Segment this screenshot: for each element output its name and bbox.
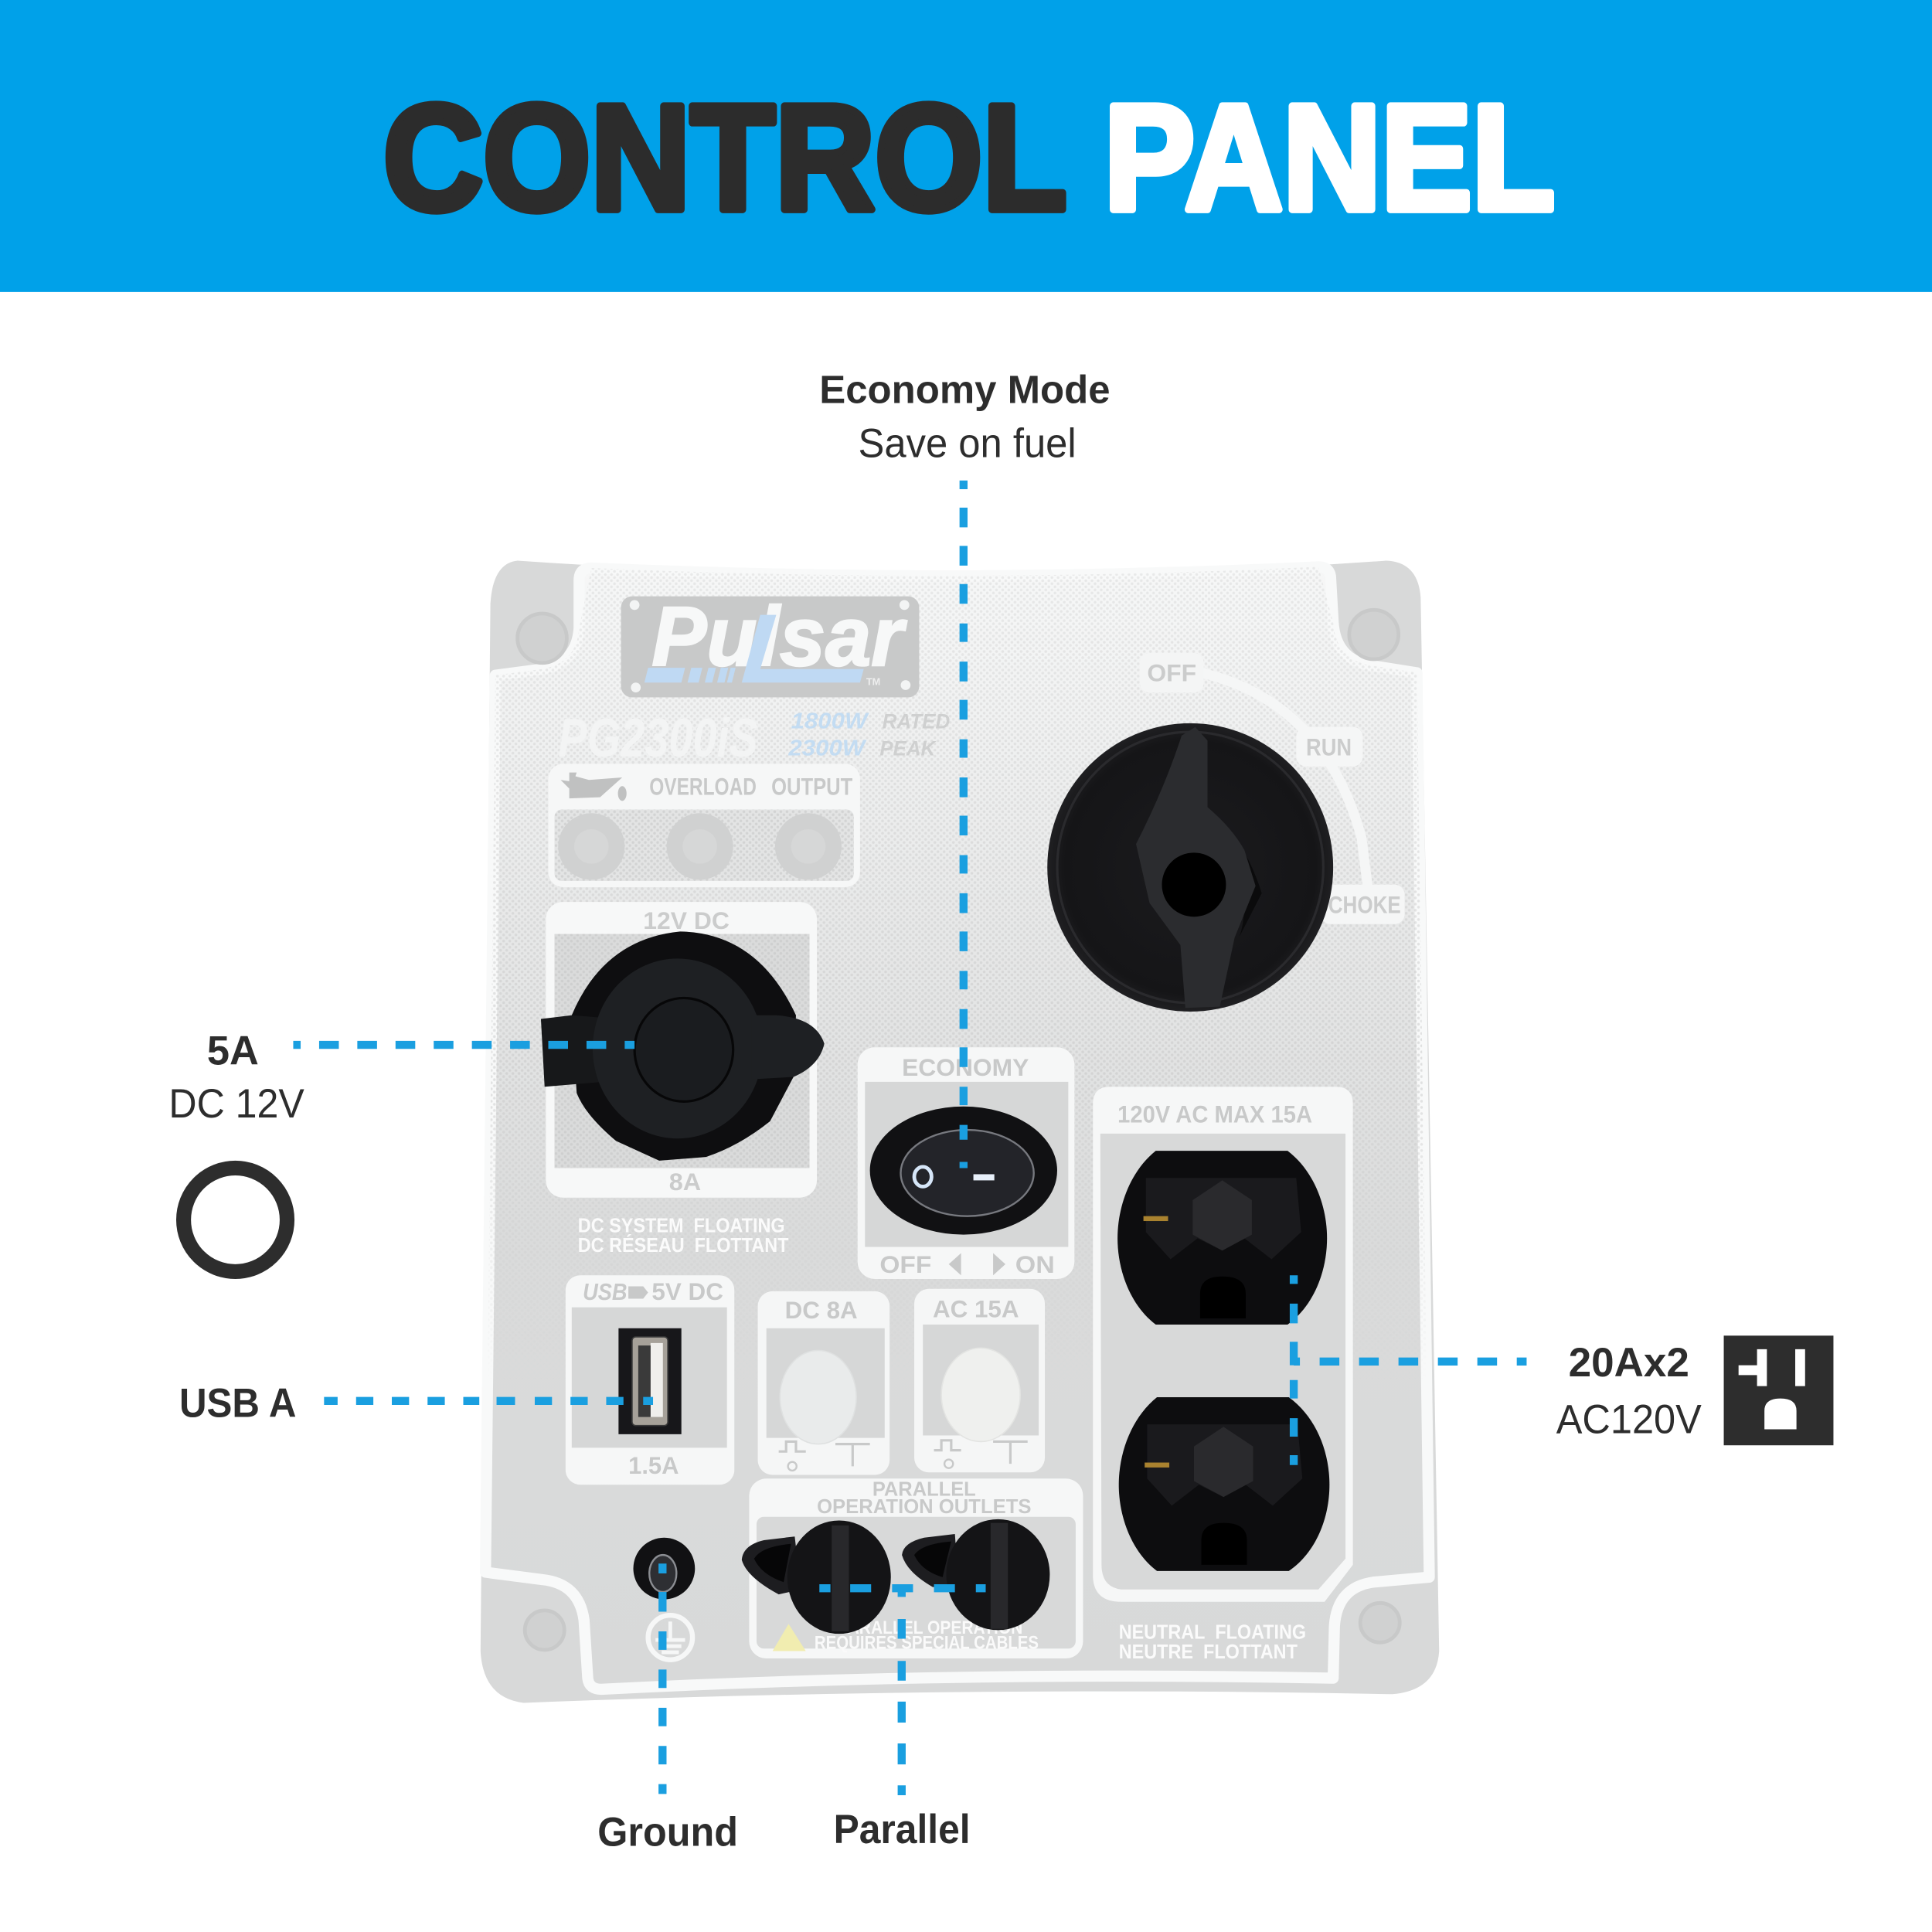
title xyxy=(383,74,1555,242)
12V socket cap xyxy=(541,931,825,1161)
outlet upper xyxy=(1117,1151,1327,1325)
indicator lights block: OUTPUT xyxy=(771,772,853,800)
outlet lower xyxy=(1119,1397,1329,1571)
header band xyxy=(0,0,1932,292)
AC 15A breaker xyxy=(914,1289,1045,1472)
callout line: USB A xyxy=(324,1399,653,1403)
model and wattage text: RATED xyxy=(883,709,950,733)
choke scale xyxy=(1140,653,1405,924)
DC 8A breaker xyxy=(758,1291,889,1475)
panel base xyxy=(481,560,1439,1702)
ground terminal xyxy=(634,1538,695,1660)
callout line: 20Ax2 AC120V xyxy=(1294,1275,1526,1465)
floating note DC xyxy=(578,1215,789,1257)
label: 5A DC 12V: DC 12V xyxy=(168,1081,304,1127)
economy switch block: ON xyxy=(1015,1250,1055,1278)
parallel outlets block: OPERATION OUTLETS xyxy=(817,1496,1032,1518)
indicator lights block xyxy=(549,764,860,887)
USB block: 5V DC xyxy=(651,1277,723,1305)
economy switch block: ECONOMY xyxy=(902,1053,1029,1081)
label: Ground: Ground xyxy=(597,1809,738,1855)
parallel knob right xyxy=(902,1519,1049,1630)
floating note DC: DC RÉSEAU FLOTTANT xyxy=(578,1234,789,1257)
label: 20Ax2 AC120V: 20Ax2 xyxy=(1569,1340,1689,1386)
12V DC socket block: 12V DC xyxy=(643,906,730,934)
AC outlets block: 120V AC MAX 15A xyxy=(1117,1100,1312,1128)
floating note AC xyxy=(1119,1622,1306,1663)
title: PANEL xyxy=(1104,74,1555,242)
corner screws xyxy=(518,610,1400,1650)
indicator lights block: OVERLOAD xyxy=(649,772,757,800)
USB block: 1.5A xyxy=(628,1451,679,1479)
economy switch block xyxy=(858,1047,1074,1279)
model and wattage text: 2300W xyxy=(787,736,867,760)
parallel outlets block: REQUIRES SPECIAL CABLES xyxy=(815,1632,1039,1653)
floating note DC: DC SYSTEM FLOATING xyxy=(578,1215,785,1236)
label: Economy Mode: Save on fuel xyxy=(858,421,1077,467)
model and wattage text xyxy=(558,707,950,768)
choke scale: CHOKE xyxy=(1328,890,1401,918)
DC 8A breaker: DC 8A xyxy=(785,1296,858,1324)
icon: round DC socket xyxy=(184,1168,287,1271)
label: 5A DC 12V xyxy=(168,1029,304,1127)
label: 20Ax2 AC120V xyxy=(1556,1340,1702,1442)
title: CONTROL xyxy=(383,74,1067,242)
economy switch block: OFF xyxy=(879,1250,931,1278)
Pulsar logo plate: Pulsar xyxy=(651,590,907,683)
parallel outlets block xyxy=(742,1478,1083,1658)
model and wattage text: PEAK xyxy=(879,736,937,760)
model and wattage text: PG2300iS xyxy=(558,707,758,768)
model and wattage text: 1800W xyxy=(791,709,870,733)
label: Economy Mode: Economy Mode xyxy=(819,367,1111,411)
callout line: parallel xyxy=(819,1588,986,1795)
label: Parallel: Parallel xyxy=(834,1807,971,1852)
AC outlets block xyxy=(1093,1087,1353,1602)
choke scale: RUN xyxy=(1306,733,1352,760)
12V DC socket block xyxy=(541,902,825,1198)
USB block xyxy=(566,1275,734,1485)
USB block: USB xyxy=(583,1280,628,1305)
parallel outlets block: PARALLEL OPERATION xyxy=(838,1617,1022,1638)
callout line: economy mode xyxy=(961,481,966,1168)
icon: AC outlet xyxy=(1724,1335,1833,1445)
label: 20Ax2 AC120V: AC120V xyxy=(1556,1396,1702,1442)
label: 5A DC 12V: 5A xyxy=(207,1029,259,1074)
AC 15A breaker: AC 15A xyxy=(933,1294,1019,1322)
parallel outlets block: PARALLEL xyxy=(872,1479,976,1501)
callout line: ground xyxy=(660,1563,665,1794)
fuel dial knob xyxy=(1047,723,1333,1012)
parallel knob left xyxy=(742,1520,891,1634)
panel: generator control panel xyxy=(481,560,1439,1702)
callout line: 5A DC 12V xyxy=(293,1043,634,1047)
choke scale: OFF xyxy=(1147,659,1196,687)
floating note AC: NEUTRAL FLOATING xyxy=(1119,1622,1306,1644)
faceplate xyxy=(485,566,1429,1689)
floating note AC: NEUTRE FLOTTANT xyxy=(1119,1641,1298,1663)
label: Economy Mode xyxy=(819,367,1111,467)
label: USB A: USB A xyxy=(179,1381,296,1427)
Pulsar logo plate: TM xyxy=(866,675,880,687)
12V DC socket block: 8A xyxy=(669,1168,701,1196)
